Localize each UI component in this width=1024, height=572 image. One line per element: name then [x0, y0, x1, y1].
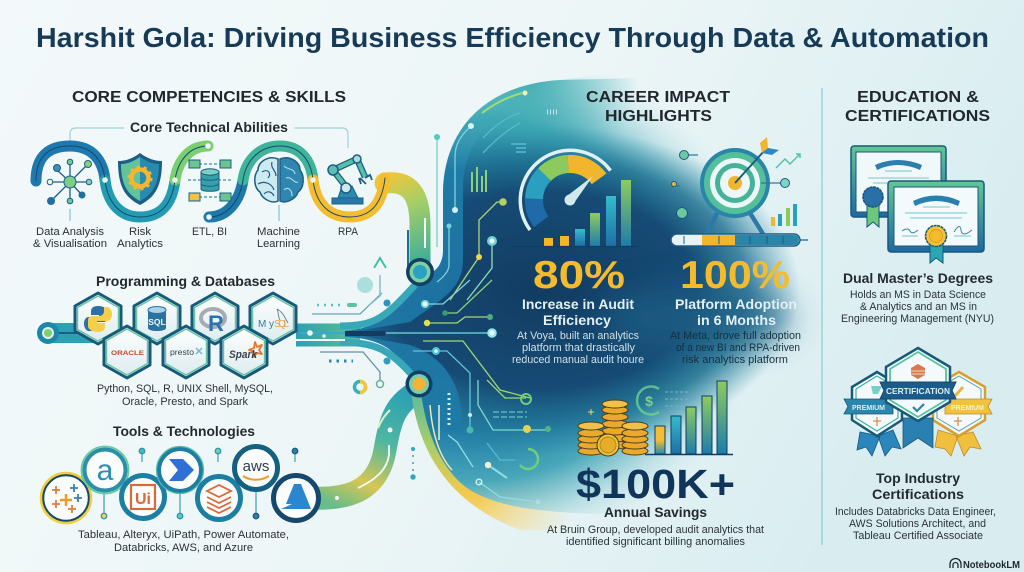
icon: AWS: aws	[243, 458, 269, 475]
icon: network nodes	[47, 159, 92, 221]
hexagon: Python	[75, 293, 121, 344]
sub-heading: Programming & Databases	[96, 274, 275, 289]
hexagon: R	[192, 293, 238, 344]
connector stems	[101, 448, 298, 519]
description: & Analytics and an MS in	[860, 301, 977, 313]
NotebookLM watermark: NotebookLM	[963, 560, 1020, 571]
stat label	[522, 296, 634, 328]
hexagon: Oracle	[104, 326, 150, 378]
caption: Oracle, Presto, and Spark	[122, 396, 249, 408]
icon: back certificate	[851, 146, 946, 227]
progress bar	[671, 234, 808, 246]
NotebookLM watermark	[950, 558, 1020, 571]
stat label: in 6 Months	[697, 312, 776, 328]
blob: teal top glow	[443, 78, 640, 240]
section heading: career impact	[586, 89, 731, 125]
icon: front certificate	[888, 181, 984, 263]
stat label: Annual Savings	[604, 504, 707, 520]
icon: Tableau	[41, 473, 91, 523]
labels: Risk	[129, 226, 152, 238]
labels: Machine	[257, 226, 300, 238]
heading: Certifications	[872, 486, 964, 502]
blob: dark right glow	[600, 288, 790, 348]
stream: RPA to upper node	[385, 183, 420, 272]
hexagon: MySQL: My	[258, 319, 274, 330]
stat description: risk analytics platform	[682, 354, 788, 366]
panel: dual master's degrees	[841, 146, 994, 325]
icon: right badge	[933, 372, 992, 456]
caption: Databricks, AWS, and Azure	[114, 542, 253, 554]
caption	[97, 383, 273, 408]
stat description	[547, 524, 764, 548]
title: Harshit Gola: Driving Business Efficiency Through Data & Automation	[36, 22, 989, 53]
hexagon: Spark: Spark	[229, 349, 258, 361]
icon: AWS	[234, 446, 278, 490]
icon: right badge: PREMIUM	[951, 403, 984, 412]
circuit traces	[312, 93, 557, 502]
panel: top industry certifications	[835, 348, 996, 542]
description: Includes Databricks Data Engineer,	[835, 506, 996, 518]
icon: ETL database	[188, 160, 232, 201]
description: Engineering Management (NYU)	[841, 313, 994, 325]
description: Holds an MS in Data Science	[850, 289, 986, 301]
hexagon: MySQL	[250, 293, 296, 344]
stream: tools to lower node	[310, 393, 415, 498]
stat label	[675, 296, 797, 328]
stat: 100%: 100%	[680, 254, 790, 297]
sub-heading: Tools & Technologies	[113, 424, 255, 439]
icon: shield with gear	[118, 153, 162, 205]
icon: Alteryx: a	[97, 454, 114, 487]
hexagon: MySQL: SQL	[274, 319, 289, 330]
caption	[78, 529, 289, 554]
icon: Power Automate	[156, 446, 204, 494]
stat description: of a new BI and RPA-driven	[676, 342, 800, 354]
icon: UiPath: Ui	[135, 491, 151, 508]
stream: programming to funnel	[296, 324, 360, 346]
icon: center badge	[880, 348, 956, 448]
icon: target with arrow	[672, 137, 800, 234]
heading	[872, 470, 964, 502]
labels: ETL, BI	[192, 226, 227, 238]
icon: Azure	[274, 476, 318, 520]
upper junction node	[406, 258, 434, 286]
hexagon: Presto: presto	[170, 347, 194, 357]
panel: audit efficiency	[512, 150, 644, 366]
section heading: career impact: HIGHLIGHTS	[605, 108, 712, 125]
blob: blue outer band	[345, 60, 830, 530]
circuit nodes	[307, 90, 551, 504]
panel: annual savings	[547, 381, 764, 548]
hexagon: Presto	[163, 326, 209, 378]
stat description: At Voya, built an analytics	[517, 330, 639, 342]
icon: Databricks	[198, 476, 240, 520]
stat description: platform that drastically	[522, 342, 636, 354]
blob: dark inner core	[345, 97, 830, 505]
panel: tools and technologies	[41, 424, 318, 554]
chart: rising bars	[512, 180, 638, 246]
stat: $100K+: $100K+	[576, 461, 735, 507]
section heading: education: CERTIFICATIONS	[845, 108, 990, 125]
icon: center badge: CERTIFICATION	[886, 387, 950, 396]
labels: Learning	[257, 238, 300, 250]
icon: left badge: PREMIUM	[852, 403, 885, 412]
icon: coin stacks	[578, 400, 648, 456]
chart: savings bars	[645, 381, 733, 454]
funnel branches	[296, 285, 415, 375]
labels: & Visualisation	[33, 238, 107, 250]
section heading: education: EDUCATION &	[857, 89, 979, 106]
icon: dollar ring	[637, 386, 690, 414]
stat label: Increase in Audit	[522, 296, 634, 312]
hexagon: R: R	[208, 311, 224, 336]
labels: RPA	[338, 226, 359, 238]
stat description: identified significant billing anomalies	[566, 536, 745, 548]
left node of programming line	[37, 322, 100, 344]
hexagon: SQL	[134, 293, 180, 344]
sub-heading: Core Technical Abilities	[130, 120, 288, 135]
stat description	[512, 330, 644, 366]
labels	[33, 226, 359, 250]
icon: brain	[255, 158, 303, 221]
labels: Data Analysis	[36, 226, 104, 238]
description	[841, 289, 994, 325]
description: AWS Solutions Architect, and	[849, 518, 986, 530]
stat description: At Bruin Group, developed audit analytics that	[547, 524, 764, 536]
hexagon: Oracle: ORACLE	[111, 350, 145, 357]
bracket	[70, 128, 348, 148]
section heading: career impact: CAREER IMPACT	[586, 89, 731, 106]
panel: programming and databases	[75, 274, 296, 408]
stat: 80%: 80%	[533, 254, 625, 297]
divider line	[821, 88, 823, 545]
lower junction node	[406, 370, 432, 398]
hexagon: SQL: SQL	[148, 317, 166, 327]
caption: Python, SQL, R, UNIX Shell, MySQL,	[97, 383, 273, 395]
icon: UiPath	[122, 476, 164, 518]
caption: Tableau, Alteryx, UiPath, Power Automate,	[78, 529, 289, 541]
stat description	[670, 330, 801, 366]
wave connector	[36, 143, 385, 220]
heading: Dual Master’s Degrees	[843, 270, 993, 286]
section heading: core competencies: CORE COMPETENCIES & SKILLS	[72, 89, 346, 106]
section heading: education	[845, 89, 990, 125]
stream: lower yellow band	[412, 395, 564, 530]
icon: Alteryx	[82, 446, 128, 494]
icon: left badge	[844, 372, 902, 456]
stat label: Efficiency	[543, 312, 611, 328]
stat description: At Meta, drove full adoption	[670, 330, 801, 342]
description	[835, 506, 996, 542]
icon: robot arm	[328, 155, 372, 204]
description: Tableau Certified Associate	[853, 530, 983, 542]
stat label: Platform Adoption	[675, 296, 797, 312]
icon: gauge	[520, 150, 610, 230]
icon: dollar ring: $	[645, 393, 653, 409]
heading: Top Industry	[876, 470, 960, 486]
panel: core technical abilities	[33, 120, 385, 250]
labels: Analytics	[117, 238, 163, 250]
panel: platform adoption	[670, 137, 808, 366]
stat description: reduced manual audit houre	[512, 354, 644, 366]
central data-stream graphic	[37, 60, 830, 530]
hexagon: Spark	[221, 326, 267, 378]
